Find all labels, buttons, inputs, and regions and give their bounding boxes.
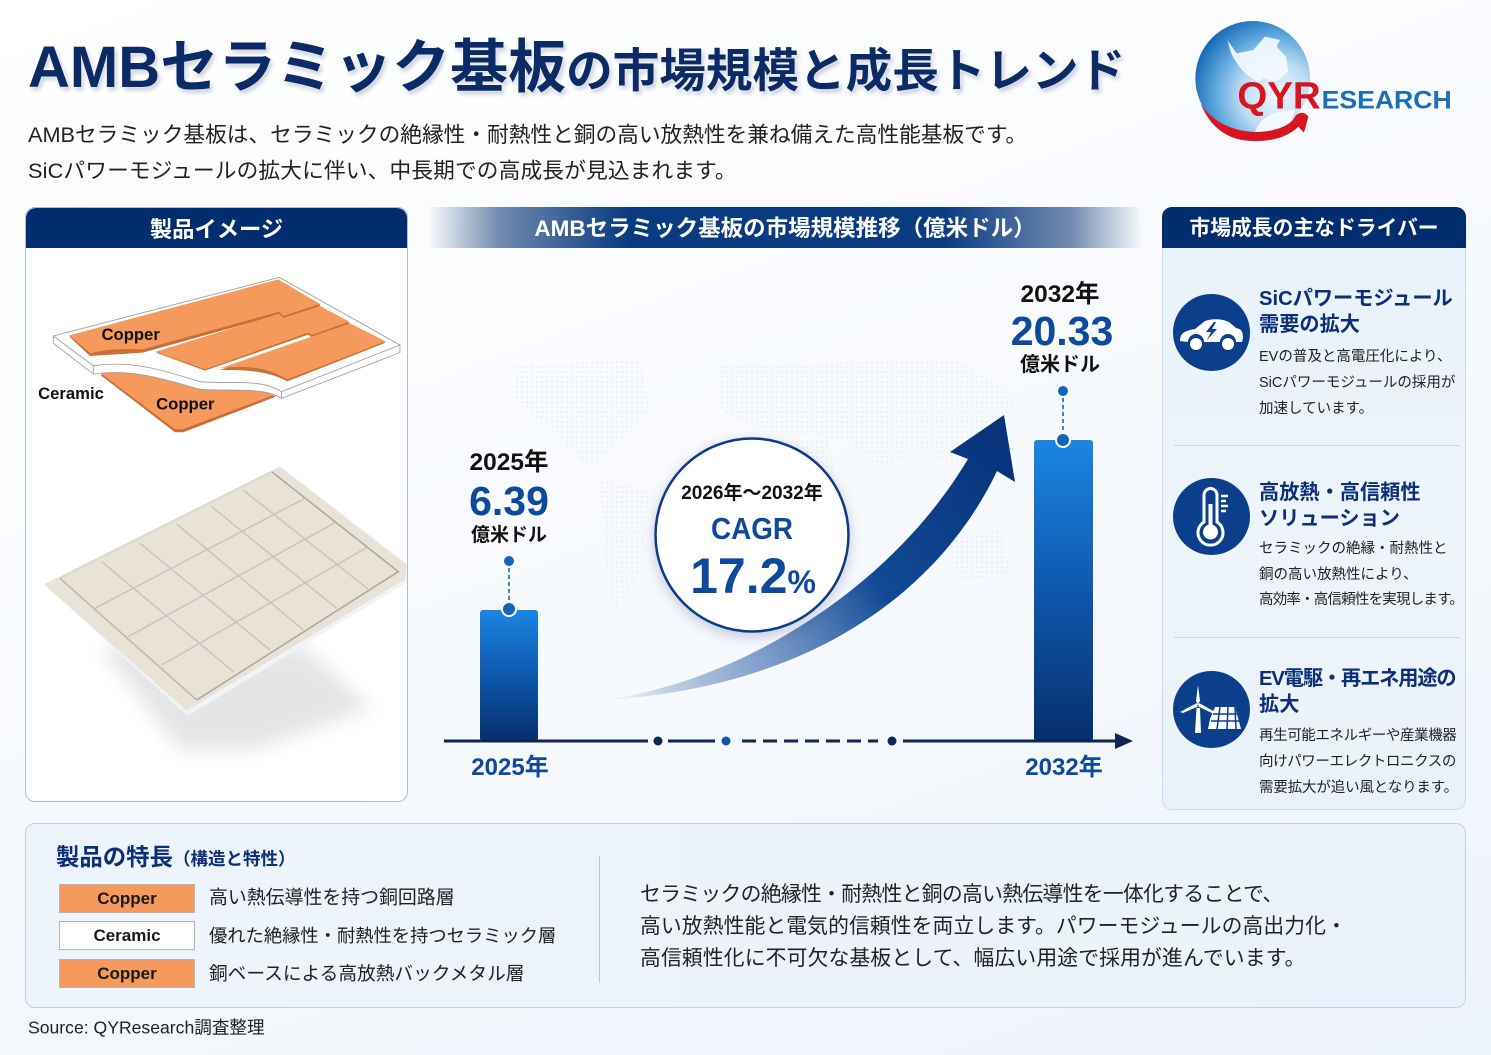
panel: growth drivers — [1162, 207, 1466, 810]
value label 2032: 億米ドル — [1020, 353, 1100, 376]
driver 1: SiC power modules: 加速しています。 — [1259, 401, 1373, 417]
heading: drivers — [1162, 207, 1466, 248]
driver 2: thermal solutions — [1173, 478, 1463, 608]
panel: market size chart — [432, 207, 1138, 781]
legend: copper back metal layer: Copper — [97, 964, 157, 983]
label: Copper top: Copper — [102, 325, 160, 344]
legend: copper circuit layer: Copper — [97, 889, 157, 908]
intro text: SiCパワーモジュールの拡大に伴い、中長期での高成長が見込まれます。 — [28, 158, 737, 183]
driver title: 高放熱・高信頼性 — [1259, 482, 1421, 504]
timeline axis — [444, 733, 1133, 749]
logo: QYResearch: QYR — [1237, 74, 1321, 116]
driver 1: SiC power modules — [1173, 288, 1455, 417]
source note: Source: QYResearch調査整理 — [28, 1017, 265, 1037]
CAGR badge — [656, 438, 848, 632]
driver title — [1259, 667, 1456, 716]
legend: ceramic layer: Ceramic — [93, 926, 161, 945]
heading: product image: 製品イメージ — [150, 217, 283, 242]
ceramic board photo — [44, 466, 408, 750]
driver 3: EV and renewables: 再生可能エネルギーや産業機器 — [1259, 728, 1456, 744]
panel: product features — [25, 823, 1466, 1008]
bar: 2025 — [480, 610, 538, 741]
value label 2025: 6.39 — [469, 478, 549, 524]
icon: wind turbine and solar panel — [1173, 671, 1250, 748]
icon: thermometer — [1173, 478, 1250, 555]
legend: copper back metal layer — [59, 959, 524, 988]
label: Ceramic: Ceramic — [38, 384, 104, 403]
driver 2: thermal solutions: 高効率・高信頼性を実現します。 — [1259, 592, 1463, 608]
leader 2032 — [1056, 386, 1070, 447]
driver title: EV電駆・再エネ用途の — [1259, 668, 1456, 690]
CAGR badge: CAGR — [711, 511, 793, 546]
CAGR badge: 2026年～2032年 — [681, 481, 823, 504]
icon: electric car — [1173, 294, 1250, 371]
intro text — [28, 122, 1027, 183]
AMB layered diagram — [38, 277, 400, 432]
value label 2032: 2032年 — [1020, 280, 1100, 308]
heading: drivers: 市場成長の主なドライバー — [1189, 217, 1439, 240]
axis label 2025: 2025年 — [471, 754, 549, 781]
driver 2: thermal solutions: セラミックの絶縁・耐熱性と — [1259, 541, 1448, 557]
heading: market size: AMBセラミック基板の市場規模推移（億米ドル） — [534, 216, 1036, 241]
title: AMBセラミック基板の市場規模と成長トレンド — [28, 35, 1125, 100]
driver 3: EV and renewables: 需要拡大が追い風となります。 — [1259, 780, 1458, 796]
feature description — [640, 883, 1347, 970]
heading: market size — [428, 207, 1142, 248]
driver 1: SiC power modules: EVの普及と高電圧化により、 — [1259, 349, 1451, 365]
feature description: 高信頼性化に不可欠な基板として、幅広い用途で採用が進んでいます。 — [640, 947, 1306, 970]
logo: QYResearch — [1195, 21, 1452, 142]
driver title — [1259, 288, 1453, 336]
driver title: SiCパワーモジュール — [1259, 288, 1453, 310]
panel: product image — [25, 207, 408, 802]
legend: copper circuit layer: 高い熱伝導性を持つ銅回路層 — [209, 888, 455, 909]
CAGR badge: 17.2% — [690, 548, 816, 604]
value label 2025: 2025年 — [469, 448, 549, 476]
driver 3: EV and renewables: 向けパワーエレクトロニクスの — [1259, 754, 1456, 770]
driver 2: thermal solutions: 銅の高い放熱性により、 — [1259, 566, 1418, 582]
driver title — [1259, 481, 1421, 530]
driver title: 拡大 — [1259, 694, 1299, 716]
legend: ceramic layer — [59, 921, 556, 950]
legend: ceramic layer: 優れた絶縁性・耐熱性を持つセラミック層 — [209, 925, 556, 946]
value label 2025: 億米ドル — [471, 524, 547, 546]
heading: product image — [26, 208, 407, 248]
legend: copper back metal layer: 銅ベースによる高放熱バックメタル層 — [209, 963, 524, 984]
leader 2025 — [502, 556, 516, 616]
heading: features: 製品の特長（構造と特性） — [56, 844, 295, 870]
world map backdrop — [515, 360, 1020, 615]
axis label 2032: 2032年 — [1025, 754, 1103, 781]
value label 2032 — [1011, 280, 1113, 376]
driver title: 需要の拡大 — [1259, 314, 1360, 336]
feature description: セラミックの絶縁性・耐熱性と銅の高い熱伝導性を一体化することで、 — [640, 883, 1283, 906]
intro text: AMBセラミック基板は、セラミックの絶縁性・耐熱性と銅の高い放熱性を兼ね備えた高性能基板です。 — [28, 122, 1027, 147]
driver title: ソリューション — [1259, 508, 1400, 530]
logo: QYResearch: ESEARCH — [1322, 86, 1452, 114]
value label 2032: 20.33 — [1011, 308, 1113, 354]
bar: 2032 — [1034, 440, 1093, 741]
growth arrow — [610, 415, 1015, 699]
driver 3: EV and renewables — [1173, 667, 1458, 796]
driver 1: SiC power modules: SiCパワーモジュールの採用が — [1259, 375, 1455, 391]
value label 2025 — [469, 448, 549, 546]
legend: copper circuit layer — [59, 884, 455, 913]
feature description: 高い放熱性能と電気的信頼性を両立します。パワーモジュールの高出力化・ — [640, 915, 1347, 938]
label: Copper bottom: Copper — [156, 395, 215, 414]
